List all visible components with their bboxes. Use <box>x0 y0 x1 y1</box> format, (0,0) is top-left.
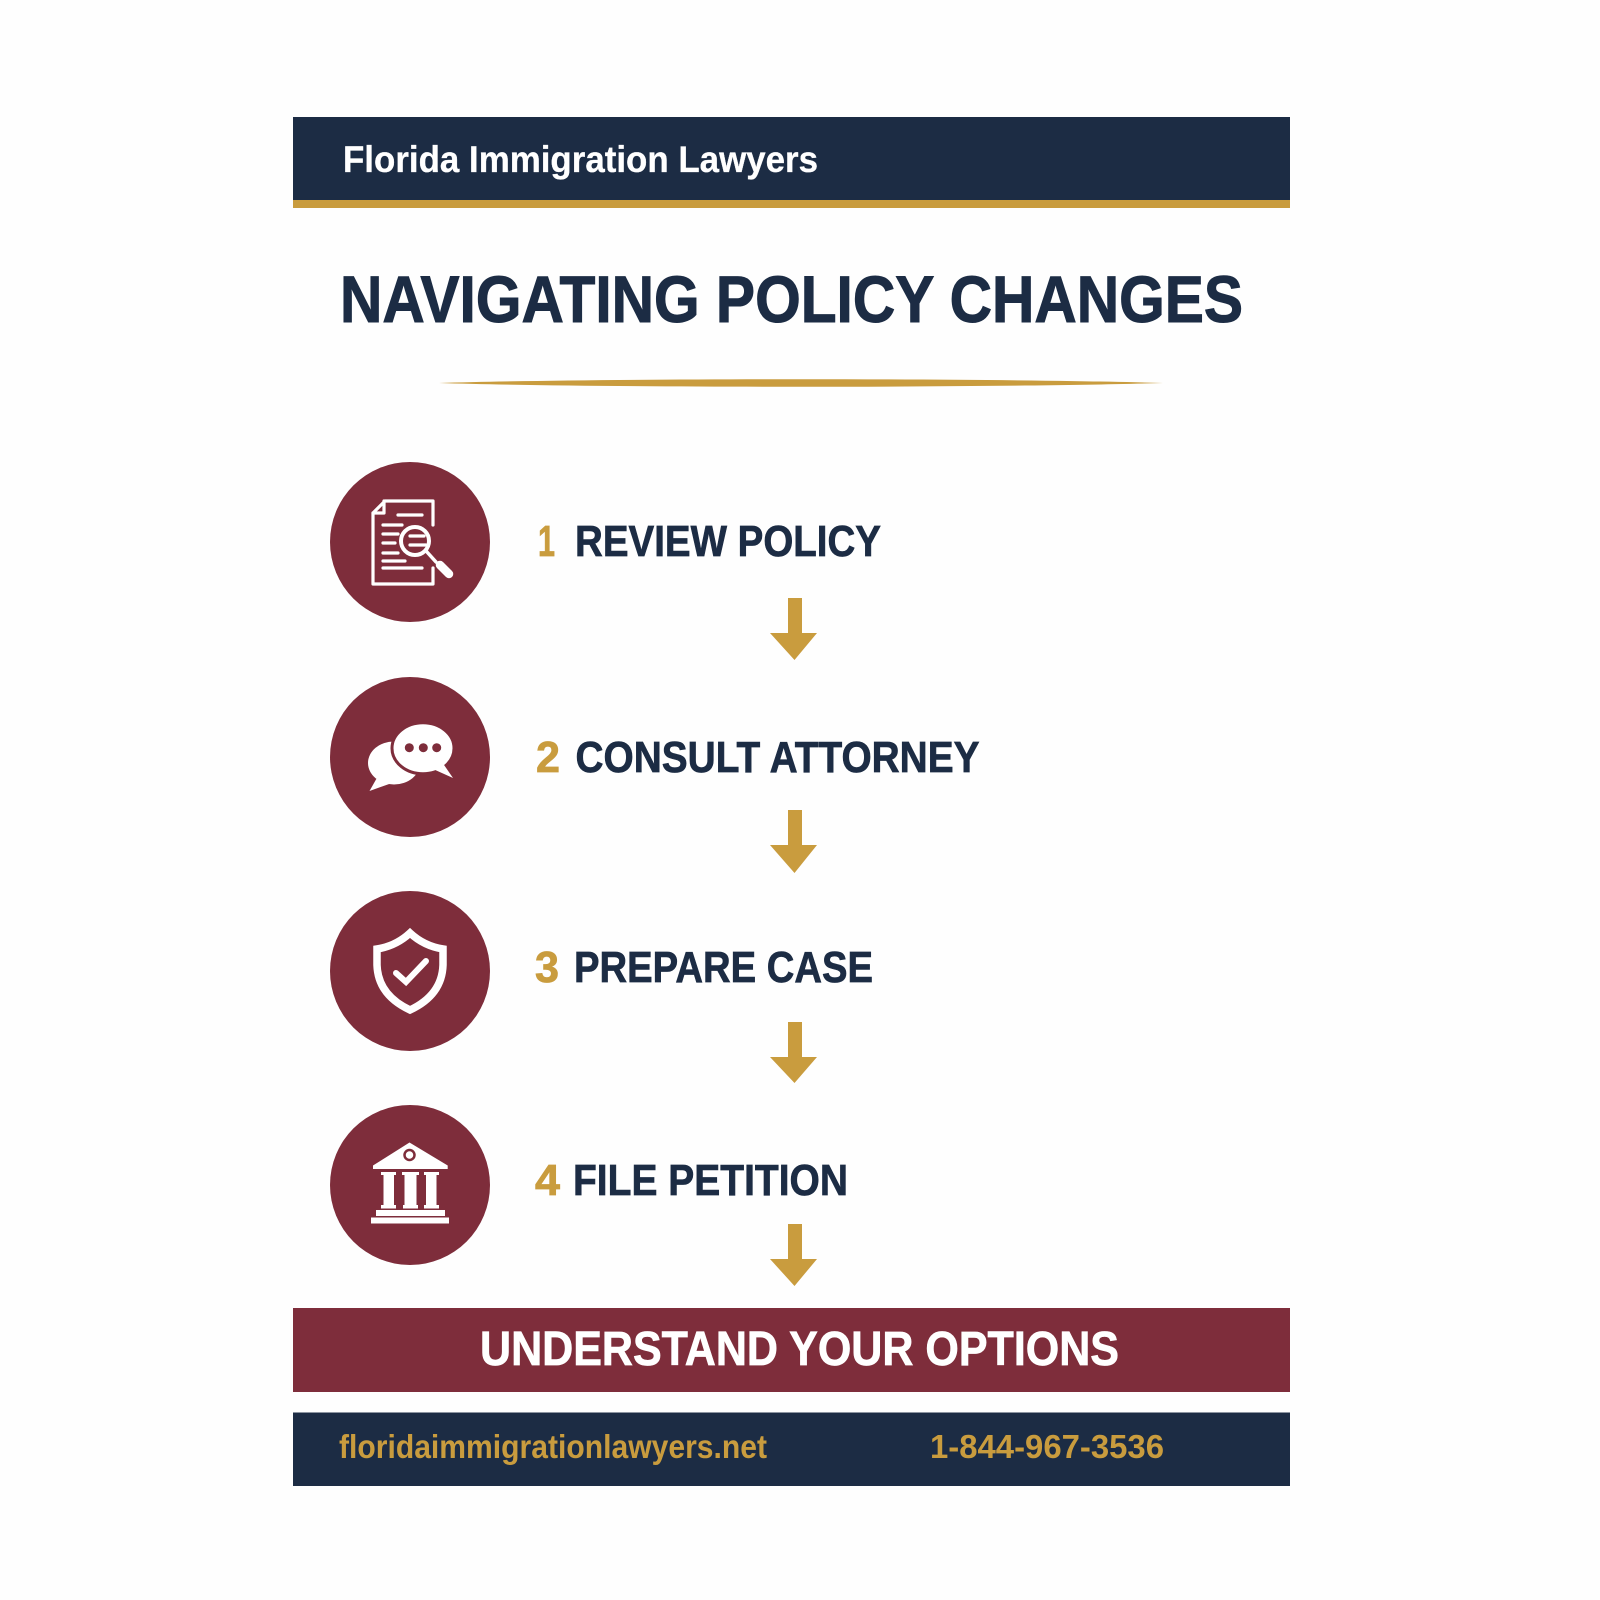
step number 3: 3 <box>535 943 559 992</box>
icon: document with magnifier <box>330 462 490 622</box>
step 3: prepare case <box>330 891 873 1051</box>
step label: PREPARE CASE <box>574 943 873 992</box>
icon: speech bubbles <box>330 677 490 837</box>
icon: shield with check <box>330 891 490 1051</box>
step number 1: 1 <box>538 517 555 566</box>
header brand name: Florida Immigration Lawyers <box>343 139 818 180</box>
title underline <box>439 379 1163 387</box>
arrow 3 <box>770 1022 817 1083</box>
step 1: review policy <box>330 462 881 622</box>
icon: courthouse <box>330 1105 490 1265</box>
step number 4: 4 <box>535 1156 561 1205</box>
step label: FILE PETITION <box>573 1156 848 1205</box>
title: NAVIGATING POLICY CHANGES <box>340 262 1243 336</box>
phone number: 1-844-967-3536 <box>930 1428 1164 1465</box>
step 4: file petition <box>330 1105 848 1265</box>
arrow 4 <box>770 1224 817 1286</box>
step label: REVIEW POLICY <box>575 517 881 566</box>
contact footer <box>293 1412 1290 1486</box>
header band <box>293 117 1290 208</box>
website: floridaimmigrationlawyers.net <box>339 1428 767 1465</box>
arrow 1 <box>770 598 817 660</box>
banner text: UNDERSTAND YOUR OPTIONS <box>480 1323 1119 1376</box>
step label: CONSULT ATTORNEY <box>576 733 980 782</box>
arrow 2 <box>770 810 817 873</box>
call to action banner <box>293 1308 1290 1392</box>
step 2: consult attorney <box>330 677 980 837</box>
step number 2: 2 <box>536 733 560 782</box>
